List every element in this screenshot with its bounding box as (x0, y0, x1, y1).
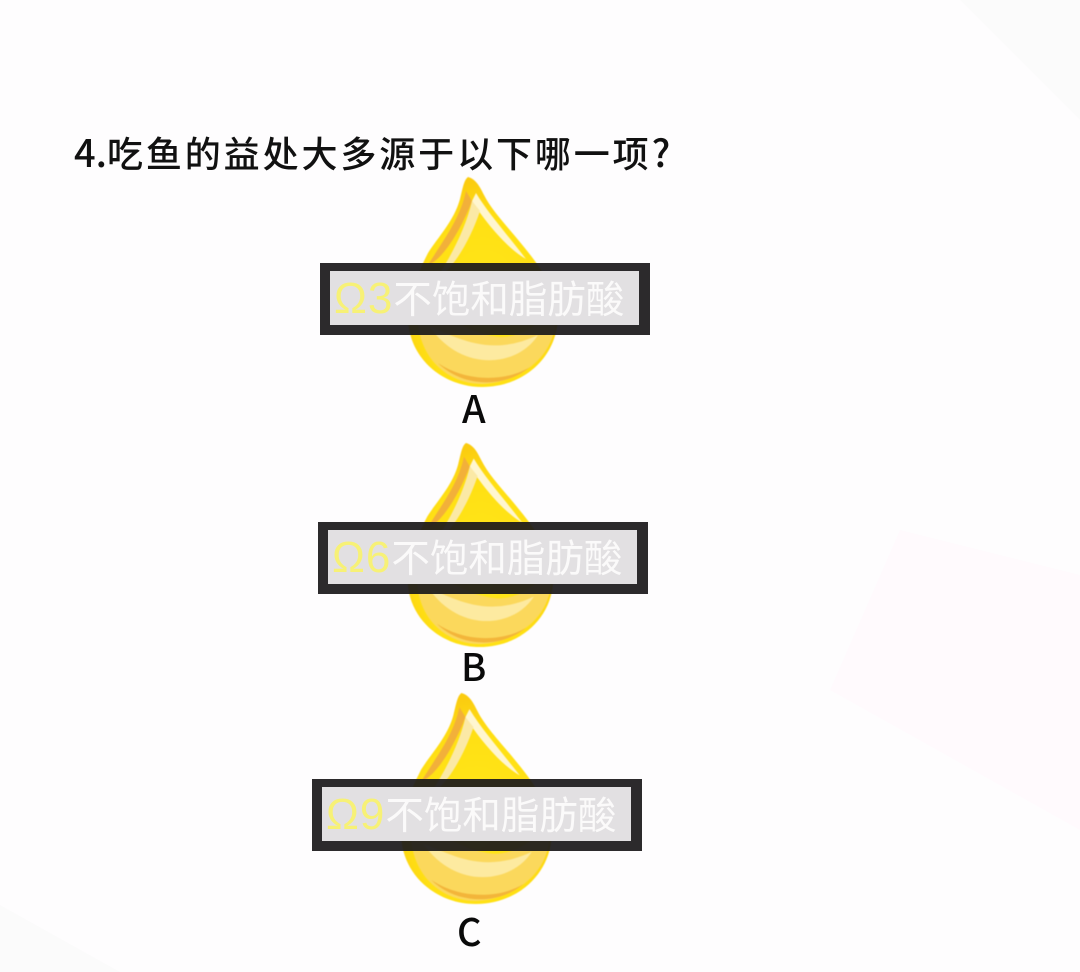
letter C: C (457, 902, 482, 957)
letter A: A (462, 379, 486, 434)
option C label band (312, 779, 642, 851)
option A label band: Ω3不饱和脂肪酸 (334, 269, 624, 325)
option B label band: Ω6不饱和脂肪酸 (332, 528, 622, 584)
option C label band: Ω9不饱和脂肪酸 (326, 785, 616, 841)
letter B: B (461, 637, 486, 692)
question title: 4.吃鱼的益处大多源于以下哪一项? (74, 123, 670, 178)
option B label band (318, 522, 648, 594)
option A label band (320, 263, 650, 335)
